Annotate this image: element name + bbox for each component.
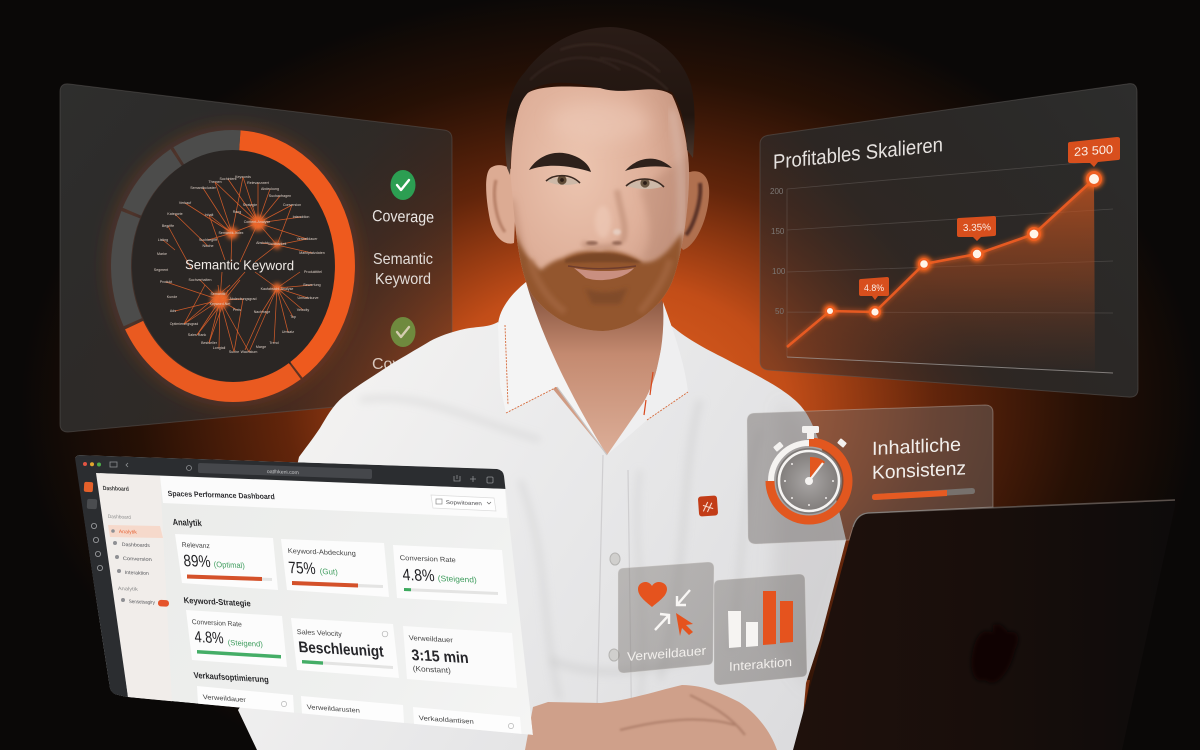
card: sales velocity [291, 618, 399, 678]
keyword network: Semantik [211, 292, 226, 296]
keyword network: Suchbegriff [199, 238, 217, 242]
icon: coverage check [390, 170, 416, 200]
label: semantic keyword list item [373, 251, 433, 288]
laptop [793, 500, 1175, 750]
head [505, 27, 695, 345]
nose [582, 190, 625, 247]
card: sales velocity: Beschleunigt [298, 639, 384, 661]
sidebar: Dashboard [108, 514, 131, 521]
title bar [160, 476, 507, 518]
keyword network: Umsatz [282, 330, 294, 334]
person [238, 27, 850, 750]
card: verweildauer: (Konstant) [412, 664, 452, 675]
card: sales velocity: Sales Velocity [297, 629, 343, 638]
keyword network: Preis [233, 308, 241, 312]
keyword network: Bewertung [303, 283, 321, 287]
shirt [238, 320, 850, 750]
window toolbar [75, 455, 507, 697]
callout: 3.35%: 3.35% [963, 222, 991, 234]
trend line [787, 179, 1094, 347]
keyword network: Rang [233, 210, 241, 214]
heading: analytik: Analytik [172, 517, 203, 528]
keyword network: Suche [229, 350, 239, 354]
card: verweildauer: Verweildauer [409, 635, 454, 644]
callout: 23 500 [1068, 137, 1120, 167]
callout: 4.8%: 4.8% [864, 283, 884, 294]
card: conversion rate 2: 4.8% [194, 628, 224, 647]
ears [486, 165, 709, 250]
panel: inhaltliche konsistenz [747, 405, 993, 544]
keyword network: Conversion [283, 203, 301, 207]
icon: stopwatch [770, 426, 848, 520]
label: inhaltliche konsistenz [872, 435, 966, 484]
keyword network: Semantikcluster [190, 186, 217, 190]
heading: verkaufsoptimierung: Verkaufsoptimierung [193, 670, 269, 684]
eyebrows [529, 153, 672, 172]
keyword network: Suchintent [220, 177, 236, 181]
area under line [787, 179, 1095, 370]
toolbar icons [110, 462, 493, 483]
card: relevanz: (Optimal) [213, 560, 245, 570]
dropdown: Sopwitoanen [446, 500, 482, 507]
icon: converging arrows [655, 590, 690, 630]
keyword network: Produkttitel [304, 270, 322, 274]
keyword network: Kaufabsicht-Analyse [261, 287, 293, 291]
title bar: Spaces Performance Dashboard [167, 489, 276, 501]
label: coverage: Coverage [372, 208, 434, 227]
window body [75, 455, 533, 735]
keyword network: Bestseller [201, 341, 218, 345]
label: inhaltliche konsistenz: Inhaltliche [872, 435, 961, 460]
row three cards: Verkaoldantisen [419, 715, 475, 726]
keyword network: Sales Rank [188, 333, 206, 337]
label: semantic keyword list item: Semantic [373, 251, 433, 268]
panel: verweildauer [618, 562, 714, 673]
sidebar: Dashboard [103, 486, 130, 493]
keyword network: Themen [208, 180, 222, 184]
icon: laptop logo [971, 624, 1018, 683]
keyword network: Inhalt [205, 213, 213, 217]
keyword network: Verkauf [179, 201, 191, 205]
shirt placket [596, 455, 632, 703]
sidebar: Interaktion [125, 570, 149, 577]
keyword network: Verweildauer [297, 237, 318, 241]
callout: 4.8% [859, 277, 889, 300]
progress bar [872, 488, 975, 500]
card: conversion rate: Conversion Rate [400, 555, 456, 564]
keyword network: Interaktion [293, 215, 309, 219]
card: conversion rate: 4.8% [402, 565, 436, 585]
panel: interaktion [714, 574, 807, 685]
icon: cursor [676, 613, 693, 636]
sidebar: Dashboards [122, 542, 151, 549]
keyword network: Top [290, 315, 296, 319]
label: interaktion: Interaktion [729, 655, 792, 674]
address bar [198, 463, 372, 479]
shirt badge [698, 495, 718, 517]
keyword network: Kategorie [167, 212, 183, 216]
keyword network: Marke [157, 252, 167, 256]
keyword network: Marge [256, 345, 266, 349]
data points [823, 170, 1104, 319]
keyword network: Keywords [235, 175, 251, 179]
card: keyword-abdeckung: (Gut) [319, 567, 339, 577]
keyword network: Velocity [297, 308, 309, 312]
keyword network: Relevanzwert [247, 181, 269, 185]
keyword network: Listing [158, 238, 168, 242]
keyword ring [119, 138, 347, 394]
keyword network: Nische [202, 244, 214, 248]
beard [516, 230, 684, 331]
orange gap behind hand [738, 680, 810, 750]
card: conversion rate 2: (Steigend) [227, 638, 264, 649]
card: relevanz: Relevanz [182, 542, 211, 550]
card: relevanz: 89% [183, 551, 212, 571]
card: relevanz [175, 534, 278, 590]
sidebar [84, 473, 172, 702]
hand [525, 685, 777, 750]
sidebar: Sensetsagiry [129, 599, 156, 606]
bar icon [728, 591, 793, 648]
keyword network: Marktplatzdaten [299, 251, 325, 255]
callout: 3.35% [957, 216, 996, 241]
eyes [546, 175, 664, 189]
keyword network: Content-Analyse [244, 220, 270, 224]
card: conversion rate 2: Conversion Rate [192, 619, 242, 628]
line chart: 50 [775, 307, 784, 316]
heading: keyword-strategie: Keyword-Strategie [183, 595, 252, 608]
keyword network: Wachstum [241, 350, 257, 354]
keyword network: Ads [170, 309, 176, 313]
row three cards: Verweildauer [203, 694, 247, 704]
hair [505, 27, 695, 175]
card: verweildauer: 3:15 min [411, 647, 469, 667]
keyword network: Semantik-Index [219, 231, 244, 235]
sidebar: Analytik [118, 586, 139, 593]
keyword network: Strategie [243, 203, 257, 207]
row three cards: Verweildarusten [307, 704, 361, 715]
line chart: 150 [771, 227, 785, 236]
keyword network: Keyword-Net [210, 302, 230, 306]
keyword network: Optimierungsgrad [170, 322, 198, 326]
line chart: 100 [772, 267, 786, 276]
keyword network: Produkt [160, 280, 172, 284]
icon: heart [638, 582, 667, 607]
label: inhaltliche konsistenz: Konsistenz [872, 458, 966, 484]
title: profitables skalieren: Profitables Skalieren [773, 133, 943, 174]
card: keyword-abdeckung [281, 539, 389, 597]
keyword network: Umsatzkurve [298, 296, 318, 300]
card: verweildauer [403, 626, 517, 688]
mouth [568, 266, 636, 280]
neck [498, 283, 667, 455]
keyword network: Suchverhalten [189, 278, 211, 282]
keyword network: Suchanfragen [269, 194, 291, 198]
card: keyword-abdeckung: Keyword-Abdeckung [288, 548, 356, 558]
keyword network: Abdeckungsgrad [230, 297, 256, 301]
keyword network: Kunde [167, 295, 177, 299]
keyword network [154, 175, 325, 354]
label: semantic keyword list item: Keyword [375, 271, 431, 288]
icon: faded check [390, 317, 416, 347]
card: conversion rate 2 [186, 610, 287, 667]
line chart: 200 [770, 187, 784, 196]
row three cards [197, 686, 522, 734]
keyword network: Sichtbarkeit [268, 242, 286, 246]
keyword network: Nachfrage [254, 310, 270, 314]
keyword network: Segment [154, 268, 168, 272]
card: conversion rate [393, 545, 507, 604]
dropdown [431, 495, 496, 511]
shirt buttons [609, 553, 620, 661]
traffic lights [83, 462, 101, 466]
line chart [770, 137, 1120, 373]
panel: semantic keyword [60, 84, 452, 432]
keyword network: Abdeckung [261, 187, 279, 191]
sidebar: Analytik [119, 529, 138, 536]
callout: 23 500: 23 500 [1074, 142, 1113, 159]
label: semantic keyword: Semantic Keyword [185, 257, 294, 273]
collar [498, 282, 688, 455]
face shading [640, 162, 689, 259]
keyword network: Longtail [213, 346, 225, 350]
label: hidden list item: Coverage [372, 356, 441, 373]
panel: dashboard window [75, 455, 533, 750]
window toolbar: oatlhkeni.com [267, 469, 299, 476]
card: keyword-abdeckung: 75% [288, 558, 317, 578]
sidebar: Conversion [123, 556, 152, 563]
keyword network: Absicht [256, 241, 268, 245]
panel: profitables skalieren [760, 84, 1138, 397]
keyword network: Begriffe [162, 224, 174, 228]
card: conversion rate: (Steigend) [437, 574, 478, 585]
keyword network: Trend [269, 341, 279, 345]
label: verweildauer: Verweildauer [627, 644, 706, 664]
